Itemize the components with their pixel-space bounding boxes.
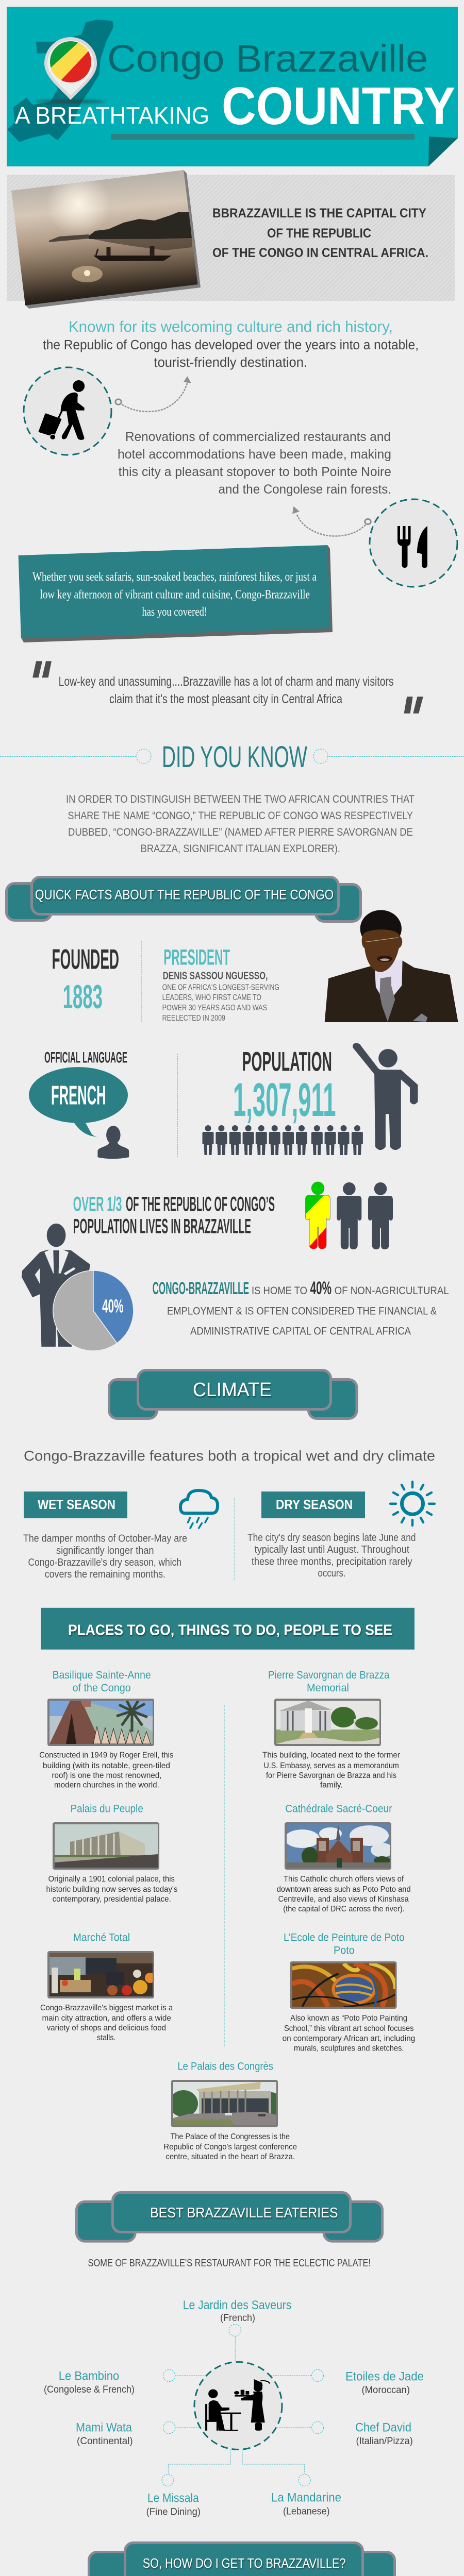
icon: traveler with suitcase (24, 367, 111, 455)
eatery: Etoiles de Jade: Etoiles de Jade (345, 2370, 424, 2384)
banner background (7, 7, 458, 166)
text block: employment: 40% (310, 1278, 332, 1298)
panel: wet season: significantly longer than (56, 1545, 154, 1556)
eatery: Chef David: (Italian/Pizza) (356, 2436, 413, 2447)
place: Cathedrale Sacre-Coeur: downtown areas such as Poto Poto and (277, 1885, 411, 1894)
eatery: Mami Wata: (Continental) (77, 2436, 133, 2447)
intro statement: BBRAZZAVILLE IS THE CAPITAL CITY (212, 206, 426, 221)
text block: employment: ADMINISTRATIVE CAPITAL OF CENTRAL AFRICA (190, 1325, 411, 1337)
stat: official language: FRENCH (51, 1080, 106, 1110)
place: Pierre Savorgnan de Brazza Memorial: U.S. Embassy, serves as a memorandum (264, 1761, 399, 1770)
place: Pierre Savorgnan de Brazza Memorial: family. (320, 1781, 343, 1790)
text: FOUNDED (52, 943, 119, 975)
place: Pierre Savorgnan de Brazza Memorial: for Pierre Savorgnan de Brazza and his (266, 1771, 396, 1780)
photo: palace (53, 1822, 159, 1870)
text: eateries intro: SOME OF BRAZZAVILLE'S RESTAURANT FOR THE ECLECTIC PALATE! (88, 2258, 371, 2269)
icon: businessman (22, 1224, 90, 1347)
eatery: La Mandarine (271, 2490, 341, 2517)
place: Marche Total (40, 1932, 173, 2042)
photo: basilica (47, 1699, 154, 1746)
place: Le Palais des Congres (163, 2061, 297, 2161)
eatery: Le Jardin des Saveurs: (French) (220, 2313, 255, 2324)
stat: official language (29, 1049, 129, 1159)
place: L'Ecole de Peinture de Poto Poto: murals, sculptures and sketches. (294, 2044, 404, 2053)
place: Basilique Sainte-Anne: building (with its notable, green-tiled (43, 1761, 170, 1770)
callout: whether you seek (19, 545, 333, 642)
panel: dry season: occurs. (318, 1568, 345, 1579)
heading: did you know: DID YOU KNOW (162, 740, 307, 774)
eatery: La Mandarine: (Lebanese) (283, 2506, 330, 2517)
place: Palais du Peuple: historic building now serves as today's (46, 1885, 177, 1894)
place: Marche Total: main city attraction, and offers a wide (42, 2014, 171, 2023)
eatery: Chef David: Chef David (355, 2420, 411, 2435)
title: Congo Brazzaville: Congo Brazzaville (107, 37, 428, 80)
connector nodes: eateries (162, 2325, 324, 2486)
place: Marche Total: stalls. (97, 2033, 115, 2042)
text block: renovations (118, 430, 391, 497)
place: Basilique Sainte-Anne: of the Congo (73, 1682, 131, 1694)
place: Palais du Peuple (46, 1803, 177, 1904)
heading: did you know (0, 740, 464, 774)
text block: did you know (66, 793, 415, 855)
place: L'Ecole de Peinture de Poto Poto: School,” this vibrant art school focuses (284, 2024, 413, 2033)
place: Pierre Savorgnan de Brazza Memorial: Pierre Savorgnan de Brazza (268, 1669, 390, 1681)
icon: closing quote marks (404, 697, 423, 714)
icon: diner and waiter (194, 2362, 282, 2449)
arrow: traveler to text (115, 376, 191, 412)
place: Marche Total: Marché Total (73, 1932, 130, 1944)
place: Marche Total: variety of shops and delicious food (47, 2024, 166, 2032)
place: Pierre Savorgnan de Brazza Memorial: Memorial (307, 1682, 349, 1694)
stat: official language: OFFICIAL LANGUAGE (44, 1049, 127, 1066)
text block: renovations: and the Congolese rain forests. (219, 482, 391, 497)
speech bubble (29, 1067, 128, 1137)
ribbon heading: how do I get there: SO, HOW DO I GET TO BRAZZAVILLE? (143, 2555, 345, 2571)
eatery: Le Bambino: Le Bambino (59, 2369, 119, 2383)
text block: renovations: hotel accommodations have been made, making (118, 447, 391, 462)
text block: did you know: SHARE THE NAME “CONGO,” THE REPUBLIC OF CONGO WAS RESPECTIVELY (68, 810, 413, 822)
callout: whether you seek: has you covered! (142, 605, 207, 619)
pin shadow (36, 100, 106, 103)
pie chart: 40 percent: 40% (102, 1295, 123, 1316)
text block: known for: the Republic of Congo has developed over the years into a notable, (43, 338, 419, 352)
ribbon heading: how do I get there (89, 2543, 395, 2576)
place: Basilique Sainte-Anne: Constructed in 1949 by Roger Erell, this (39, 1751, 173, 1760)
place: Palais du Peuple: Originally a 1901 colonial palace, this (48, 1875, 175, 1884)
place: Palais du Peuple: Palais du Peuple (71, 1803, 143, 1815)
place: Cathedrale Sacre-Coeur: Centreville, and also views of Kinshasa (278, 1895, 409, 1904)
place: L'Ecole de Peinture de Poto Poto: L’Ecole de Peinture de Poto (284, 1932, 405, 1944)
ribbon heading: quick facts (6, 877, 361, 921)
stat: president: POWER 30 YEARS AGO AND WAS (162, 1004, 267, 1012)
place: L'Ecole de Peinture de Poto Poto (283, 1932, 415, 2053)
text block: renovations: Renovations of commercialized restaurants and (125, 430, 391, 444)
stat: population (202, 1043, 418, 1155)
stat: president: PRESIDENT (163, 945, 230, 970)
photo: market (47, 1951, 155, 1998)
text block: did you know: IN ORDER TO DISTINGUISH BETWEEN THE TWO AFRICAN COUNTRIES THAT (66, 793, 415, 805)
panel: wet season (23, 1490, 218, 1580)
quote text: claim that it's the most pleasant city in Central Africa (109, 692, 342, 706)
panel: capital city intro (7, 167, 455, 309)
ribbon heading: eateries: BEST BRAZZAVILLE EATERIES (150, 2205, 338, 2221)
place: Cathedrale Sacre-Coeur: (the capital of DRC across the river). (283, 1905, 405, 1913)
photo: congress palace (169, 2080, 283, 2127)
photo shadow (25, 170, 201, 309)
panel: dry season: typically last until August. Throughout (255, 1544, 409, 1555)
stat: founded (52, 943, 119, 1015)
flag map pin (44, 37, 97, 100)
icon: sun (390, 1482, 435, 1526)
icon: person bust (97, 1126, 129, 1159)
text block: renovations: this city a pleasant stopover to both Pointe Noire (119, 465, 391, 479)
eatery: Etoiles de Jade (345, 2370, 424, 2396)
photo: president portrait (325, 910, 458, 1022)
eatery: Le Missala: (Fine Dining) (146, 2507, 201, 2518)
place: Basilique Sainte-Anne: modern churches in the world. (54, 1781, 159, 1790)
place: L'Ecole de Peinture de Poto Poto: Poto (334, 1945, 355, 1957)
panel: dry season: DRY SEASON (276, 1497, 353, 1512)
text block: employment: OF NON-AGRICULTURAL (335, 1285, 449, 1297)
photo: memorial (274, 1699, 381, 1746)
pie chart: 40 percent (53, 1270, 134, 1351)
place: Basilique Sainte-Anne: roof) is one the most renowned, (52, 1771, 161, 1780)
place: Basilique Sainte-Anne (39, 1669, 173, 1790)
callout: whether you seek: low key afternoon of vibrant culture and cuisine, Congo-Brazzaville (40, 588, 310, 602)
text block: did you know: BRAZZA, SIGNIFICANT ITALIAN EXPLORER). (141, 843, 340, 855)
stat: over one third: POPULATION LIVES IN BRAZZAVILLE (73, 1215, 251, 1238)
panel: wet season: The damper months of October-May are (23, 1533, 187, 1545)
eatery: Mami Wata: Mami Wata (76, 2420, 132, 2435)
text block: employment (153, 1278, 449, 1337)
callout: whether you seek: Whether you seek safaris, sun-soaked beaches, rainforest hikes, or just a (32, 570, 317, 584)
place: L'Ecole de Peinture de Poto Poto: on contemporary African art, including (283, 2034, 415, 2043)
eatery: Le Bambino: (Congolese & French) (44, 2384, 135, 2395)
eatery: Le Missala: Le Missala (147, 2492, 199, 2505)
ribbon heading: climate (109, 1370, 357, 1419)
folded corner (428, 137, 458, 166)
header banner (7, 7, 458, 166)
quote text (59, 674, 394, 706)
place: Marche Total: Congo-Brazzaville's biggest market is a (40, 2004, 173, 2012)
eatery: Chef David (355, 2420, 413, 2447)
eatery: Le Missala (146, 2492, 201, 2518)
place: Le Palais des Congres: The Palace of the Congresses is the (171, 2132, 290, 2141)
quote (32, 661, 423, 714)
text block: known for: Known for its welcoming culture and rich history, (69, 318, 393, 335)
icon: fork and knife (370, 499, 457, 587)
stat: president: ONE OF AFRICA'S LONGEST-SERVING (162, 983, 279, 992)
text block: did you know: DUBBED, “CONGO-BRAZZAVILLE” (NAMED AFTER PIERRE SAVORGNAN DE (68, 826, 413, 838)
eatery: Le Jardin des Saveurs (183, 2298, 291, 2324)
place: Le Palais des Congres: Le Palais des Congrès (177, 2061, 273, 2073)
eatery: Etoiles de Jade: (Moroccan) (362, 2385, 410, 2396)
arrow: dining to text (292, 506, 371, 536)
stat: president: DENIS SASSOU NGUESSO, (163, 971, 268, 982)
stat: president: LEADERS, WHO FIRST CAME TO (162, 993, 261, 1002)
eatery: Mami Wata (76, 2420, 133, 2447)
photo: river at sunset (8, 167, 201, 309)
place: Le Palais des Congres: Republic of Congo's largest conference (163, 2143, 297, 2151)
eatery: Le Bambino (44, 2369, 135, 2395)
place: L'Ecole de Peinture de Poto Poto: Also known as “Poto Poto Painting (290, 2014, 407, 2023)
place: Pierre Savorgnan de Brazza Memorial: This building, located next to the former (262, 1751, 401, 1760)
text block: employment: IS HOME TO (252, 1285, 307, 1297)
place: Cathedrale Sacre-Coeur: Cathédrale Sacré-Coeur (285, 1803, 392, 1815)
photo: painting (290, 1961, 397, 2009)
text block: employment: CONGO-BRAZZAVILLE (153, 1279, 249, 1298)
map of Congo silhouette (7, 20, 113, 142)
stat: over one third (73, 1193, 275, 1238)
place: Palais du Peuple: contemporary, presidential palace. (53, 1895, 171, 1904)
icon: rain cloud (180, 1490, 218, 1528)
panel: wet season: WET SEASON (38, 1497, 115, 1512)
text block: known for (43, 318, 419, 370)
stat: president (162, 945, 279, 1023)
stat: population: 1,307,911 (233, 1074, 336, 1126)
icon: row of people (202, 1125, 363, 1155)
place: Cathedrale Sacre-Coeur (277, 1803, 411, 1913)
banner: places to go: PLACES TO GO, THINGS TO DO, PEOPLE TO SEE (68, 1622, 392, 1638)
panel: dry season (247, 1482, 435, 1579)
icon: three people, one in flag colours (305, 1182, 393, 1249)
panel: wet season: covers the remaining months. (45, 1569, 165, 1580)
stat: president: REELECTED IN 2009 (162, 1014, 225, 1023)
photo: cathedral (285, 1822, 393, 1870)
eatery: Le Jardin des Saveurs: Le Jardin des Saveurs (183, 2298, 291, 2312)
panel: wet season: Congo-Brazzaville's dry season, which (28, 1557, 181, 1568)
eatery: La Mandarine: La Mandarine (271, 2490, 341, 2505)
connector lines: eateries (169, 2336, 311, 2474)
underline bar (111, 134, 415, 140)
ribbon heading: eateries (76, 2193, 383, 2241)
place: Basilique Sainte-Anne: Basilique Sainte-Anne (53, 1669, 151, 1681)
panel: dry season: The city's dry season begins late June and (247, 1532, 416, 1544)
panel: dry season: these three months, precipitation rarely (252, 1556, 412, 1567)
icon: person raising hand (353, 1043, 418, 1150)
text block: known for: tourist-friendly destination. (154, 355, 307, 370)
icon: opening quote marks (32, 661, 52, 677)
ribbon heading: climate: CLIMATE (193, 1379, 272, 1401)
intro statement: OF THE CONGO IN CENTRAL AFRICA. (212, 246, 428, 260)
stat: founded: 1883 (63, 978, 103, 1015)
ribbon heading: quick facts: QUICK FACTS ABOUT THE REPUBLIC OF THE CONGO (35, 887, 334, 903)
stat: over one third: OVER 1/3 (73, 1193, 122, 1215)
place: Le Palais des Congres: centre, situated in the heart of Brazza. (166, 2153, 295, 2161)
banner: places to go (41, 1608, 415, 1650)
stat: population: POPULATION (242, 1047, 332, 1077)
text: OF THE REPUBLIC OF CONGO’S (126, 1193, 275, 1215)
title: a breathtaking: A BREATHTAKING (15, 102, 209, 129)
intro statement: OF THE REPUBLIC (267, 226, 371, 241)
intro statement (212, 206, 428, 260)
place: Pierre Savorgnan de Brazza Memorial (262, 1669, 401, 1790)
place: Cathedrale Sacre-Coeur: This Catholic church offers views of (284, 1875, 404, 1884)
text: climate intro: Congo-Brazzaville features both a tropical wet and dry climate (24, 1448, 435, 1464)
